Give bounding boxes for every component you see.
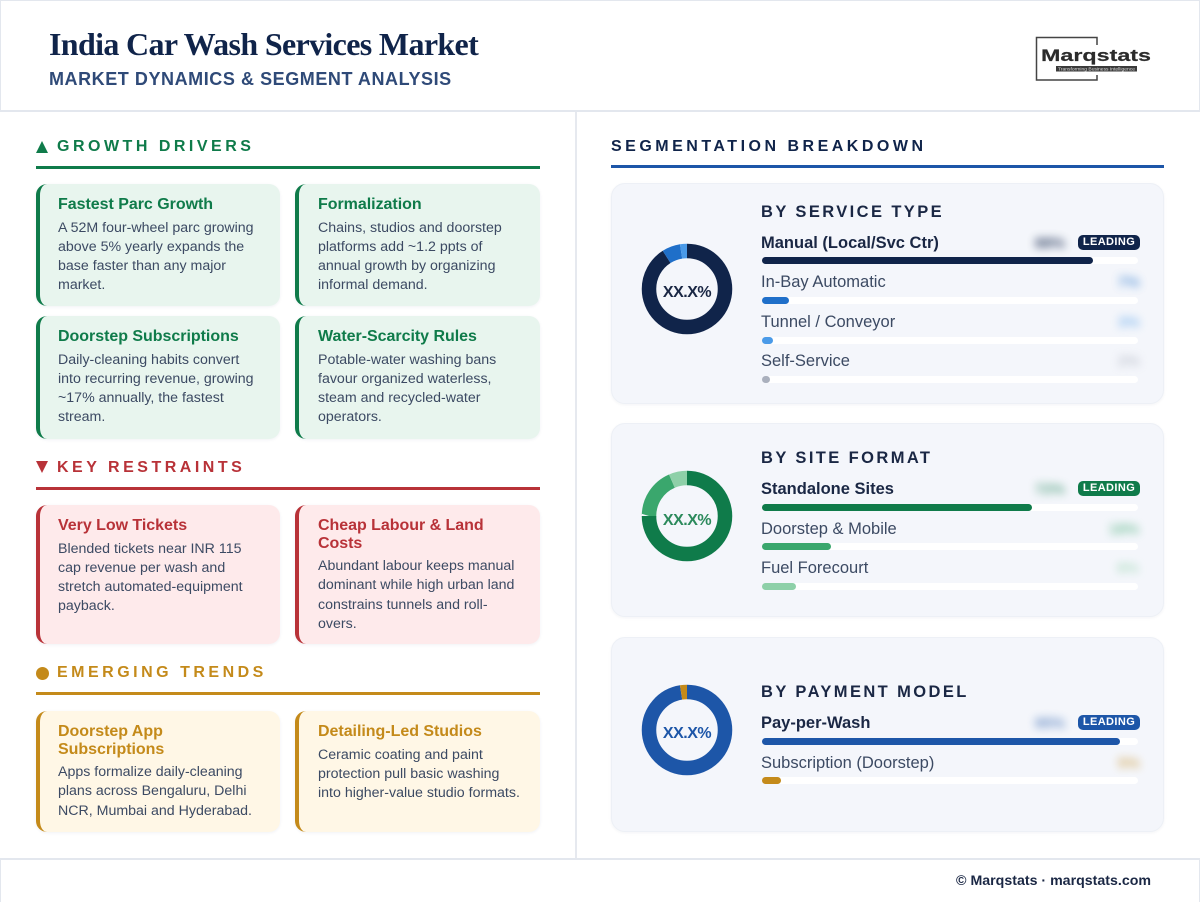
- heading: emerging trends: EMERGING TRENDS: [57, 664, 267, 681]
- footer: [0, 858, 1200, 902]
- logo: Marqstats: [1041, 46, 1151, 65]
- logo: [1036, 36, 1151, 81]
- card: water-scarcity rules: favour organized waterless,: [318, 371, 492, 387]
- row: doorstep and mobile: Doorstep & Mobile: [761, 520, 897, 538]
- value: manual (blurred): 88%: [1035, 234, 1065, 252]
- card: cheap labour and land costs: [295, 505, 540, 644]
- card: cheap labour and land costs: Cheap Labour & Land: [318, 517, 484, 534]
- heading: by site format: BY SITE FORMAT: [761, 449, 932, 467]
- card: fastest parc growth: above 5% yearly expands the: [58, 239, 244, 255]
- heading: by payment model: BY PAYMENT MODEL: [761, 683, 969, 701]
- panel: by service type: [611, 183, 1164, 404]
- row: fuel forecourt: Fuel Forecourt: [761, 559, 868, 577]
- card: very low tickets: payback.: [58, 598, 115, 614]
- card: detailing-led studios: into higher-value studio formats.: [318, 785, 520, 801]
- card: very low tickets: [36, 505, 280, 644]
- bar: self-service: [762, 376, 1138, 383]
- donut: payment model: [642, 684, 732, 776]
- title: India Car Wash Services Market: [49, 26, 478, 62]
- donut: service type: [642, 244, 732, 334]
- card: formalization: platforms add ~1.2 ppts of: [318, 239, 482, 255]
- badge: leading: LEADING: [1083, 236, 1135, 248]
- row: manual: Manual (Local/Svc Ctr): [761, 234, 939, 252]
- card: water-scarcity rules: operators.: [318, 409, 382, 425]
- value: pay-per-wash (blurred): 95%: [1035, 714, 1065, 732]
- card: fastest parc growth: Fastest Parc Growth: [58, 196, 213, 213]
- column divider: [575, 112, 577, 858]
- heading: segmentation breakdown: [611, 138, 1164, 168]
- card: doorstep app subscriptions: Apps formalize daily-cleaning: [58, 764, 243, 780]
- value: fuel (blurred): 9%: [1117, 560, 1139, 576]
- card: cheap labour and land costs: dominant while high urban land: [318, 577, 514, 593]
- footer credit: © Marqstats · marqstats.com: [956, 873, 1151, 889]
- logo: Transforming Business Intelligence: [1058, 66, 1136, 71]
- donut: site format: [642, 470, 732, 562]
- card: water-scarcity rules: steam and recycled-water: [318, 390, 480, 406]
- donut: service type: XX.X%: [663, 284, 711, 301]
- bar: tunnel: [762, 337, 1138, 344]
- value: doorstep (blurred): 18%: [1109, 520, 1139, 538]
- bar: fuel: [762, 583, 1138, 590]
- card: very low tickets: Very Low Tickets: [58, 517, 187, 534]
- value: tunnel (blurred): 3%: [1118, 314, 1140, 330]
- section: growth drivers: [36, 138, 540, 440]
- card: detailing-led studios: [295, 711, 540, 832]
- icon: circle: [36, 667, 49, 680]
- card: doorstep app subscriptions: Subscriptions: [58, 740, 164, 758]
- card: water-scarcity rules: Water-Scarcity Rules: [318, 328, 477, 345]
- header: [0, 0, 1200, 112]
- row: pay-per-wash: Pay-per-Wash: [761, 714, 870, 732]
- value: standalone (blurred): 72%: [1035, 480, 1065, 498]
- card: detailing-led studios: protection pull basic washing: [318, 766, 499, 782]
- donut: payment model: XX.X%: [663, 725, 711, 742]
- card: doorstep subscriptions: stream.: [58, 409, 105, 425]
- card: doorstep subscriptions: ~17% annually, the fastest: [58, 390, 224, 406]
- heading: key restraints: KEY RESTRAINTS: [57, 459, 245, 476]
- heading: segmentation breakdown: SEGMENTATION BREAKDOWN: [611, 138, 927, 155]
- card: doorstep subscriptions: Doorstep Subscriptions: [58, 328, 239, 345]
- card: detailing-led studios: Ceramic coating and paint: [318, 746, 483, 762]
- bar: in-bay: [762, 297, 1138, 304]
- card: cheap labour and land costs: Costs: [318, 534, 362, 552]
- row: self-service: Self-Service: [761, 352, 850, 370]
- value: in-bay (blurred): 7%: [1118, 274, 1140, 290]
- card: very low tickets: stretch automated-equipment: [58, 579, 243, 595]
- card: very low tickets: cap revenue per wash and: [58, 560, 225, 576]
- card: fastest parc growth: A 52M four-wheel parc growing: [58, 220, 254, 236]
- card: doorstep subscriptions: Daily-cleaning habits convert: [58, 352, 239, 368]
- bar: pay-per-wash: [762, 738, 1138, 745]
- section: key restraints: [36, 459, 540, 644]
- card: detailing-led studios: Detailing-Led Studios: [318, 723, 482, 740]
- card: fastest parc growth: market.: [58, 277, 105, 293]
- card: water-scarcity rules: [295, 316, 540, 439]
- card: doorstep app subscriptions: [36, 711, 280, 832]
- bar: subscription: [762, 777, 1138, 784]
- card: fastest parc growth: base faster than any major: [58, 258, 226, 274]
- card: doorstep app subscriptions: Doorstep App: [58, 723, 163, 740]
- bar: manual: [762, 257, 1138, 264]
- row: in-bay automatic: In-Bay Automatic: [761, 273, 886, 291]
- bar: standalone: [762, 504, 1138, 511]
- row: tunnel conveyor: Tunnel / Conveyor: [761, 313, 895, 331]
- heading: by service type: BY SERVICE TYPE: [761, 203, 944, 221]
- row: subscription: Subscription (Doorstep): [761, 754, 934, 772]
- value: self-service (blurred): 2%: [1118, 352, 1140, 370]
- donut: site format: XX.X%: [663, 512, 711, 529]
- card: doorstep app subscriptions: NCR, Mumbai and Hyderabad.: [58, 803, 252, 819]
- section: emerging trends: [36, 664, 540, 832]
- card: very low tickets: Blended tickets near INR 115: [58, 540, 242, 556]
- card: doorstep app subscriptions: plans across Bengaluru, Delhi: [58, 783, 246, 799]
- panel: by site format: [611, 423, 1164, 617]
- card: formalization: annual growth by organizing: [318, 258, 495, 274]
- icon: up triangle: [36, 141, 48, 153]
- card: doorstep subscriptions: [36, 316, 280, 439]
- card: formalization: informal demand.: [318, 277, 428, 293]
- badge: leading: [1078, 715, 1140, 730]
- card: formalization: Formalization: [318, 196, 422, 213]
- card: formalization: [295, 184, 540, 306]
- badge: leading: [1078, 235, 1140, 250]
- card: cheap labour and land costs: constrains tunnels and roll-: [318, 597, 488, 613]
- heading: growth drivers: GROWTH DRIVERS: [57, 138, 254, 155]
- card: doorstep subscriptions: into recurring revenue, growing: [58, 371, 254, 387]
- card: formalization: Chains, studios and doorstep: [318, 220, 502, 236]
- card: cheap labour and land costs: Abundant labour keeps manual: [318, 558, 514, 574]
- icon: down triangle: [36, 461, 48, 473]
- badge: leading: LEADING: [1083, 482, 1135, 494]
- badge: leading: LEADING: [1083, 716, 1135, 728]
- value: subscription (blurred): 5%: [1118, 754, 1140, 772]
- badge: leading: [1078, 481, 1140, 496]
- card: water-scarcity rules: Potable-water washing bans: [318, 352, 496, 368]
- subtitle: MARKET DYNAMICS & SEGMENT ANALYSIS: [49, 69, 452, 89]
- bar: doorstep: [762, 543, 1138, 550]
- row: standalone sites: Standalone Sites: [761, 480, 894, 498]
- card: fastest parc growth: [36, 184, 280, 306]
- card: cheap labour and land costs: overs.: [318, 616, 357, 632]
